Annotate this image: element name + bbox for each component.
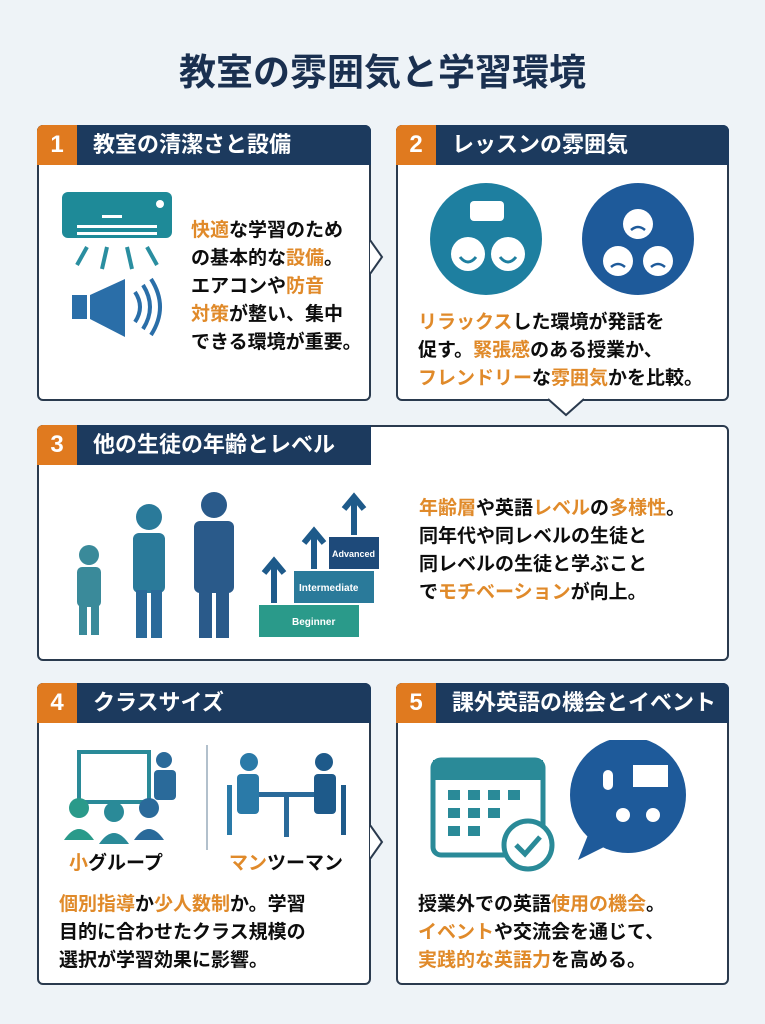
icon: people and level stairs: Advanced [332,549,375,559]
panel: 2 [396,125,729,401]
header 5: 課外英語の機会とイベント [452,690,716,715]
icon: air conditioner and speaker [62,192,172,337]
text 5: 実践的な英語力を高める。 [418,950,646,971]
icon: happy and stressed faces [430,183,694,295]
text 3: 同年代や同レベルの生徒と [419,526,647,547]
text 2 [418,312,703,389]
text 2: 促す。緊張感のある授業か、 [418,340,663,361]
arrow: panel 4 notch [370,825,384,859]
panel: 3 [37,425,729,661]
header 1: 1 [50,131,64,158]
icon: people and level stairs: Beginner [292,617,335,628]
text 1 [191,220,362,353]
text 1: 快適な学習のため [191,220,343,241]
text 5: 授業外での英語使用の機会。 [418,894,665,915]
icon: calendar and event bubble [430,740,686,872]
header 3: 3 [50,431,64,458]
text 1: エアコンや防音 [191,276,324,297]
icon: people and level stairs [77,492,379,638]
text 5: イベントや交流会を通じて、 [418,922,664,943]
text 4 [59,894,306,971]
header 5 [396,683,729,723]
title: 教室の雰囲気と学習環境 [179,52,586,93]
text 3: 同レベルの生徒と学ぶこと [419,554,647,575]
text 3: でモチベーションが向上。 [419,582,647,603]
text 2: リラックスした環境が発話を [418,312,664,333]
text 3: 年齢層や英語レベルの多様性。 [419,498,685,519]
panel: 5 [396,683,729,985]
text 1: できる環境が重要。 [191,332,362,353]
text 1: の基本的な設備。 [191,248,343,269]
header 4 [37,683,371,723]
text 4: 目的に合わせたクラス規模の [59,922,306,943]
header 4: クラスサイズ [93,690,224,715]
text 4: 選択が学習効果に影響。 [59,950,268,971]
arrow: panel 2 tail [548,398,584,416]
header 1 [37,125,371,165]
header 4: 4 [50,689,64,716]
text 2: フレンドリーな雰囲気かを比較。 [418,368,703,389]
text 3 [419,498,685,603]
label: one-on-one: マンツーマン [229,853,343,874]
text 1: 対策が整い、集中 [191,304,343,325]
panel: 4 [37,683,371,985]
header 1: 教室の清潔さと設備 [93,132,291,157]
panel: 1 [37,125,371,401]
arrow: panel 1 notch [370,240,384,274]
header 2 [396,125,729,165]
icon: classroom and one-on-one [64,745,346,850]
header 2: 2 [409,131,423,158]
header 2: レッスンの雰囲気 [452,132,628,157]
text 4: 個別指導か少人数制か。学習 [59,894,306,915]
header 3 [37,425,371,465]
header 3: 他の生徒の年齢とレベル [93,432,335,457]
header 5: 5 [409,689,423,716]
icon: people and level stairs: Intermediate [299,583,359,594]
label: small group: 小グループ [69,853,163,874]
text 5 [418,894,665,971]
